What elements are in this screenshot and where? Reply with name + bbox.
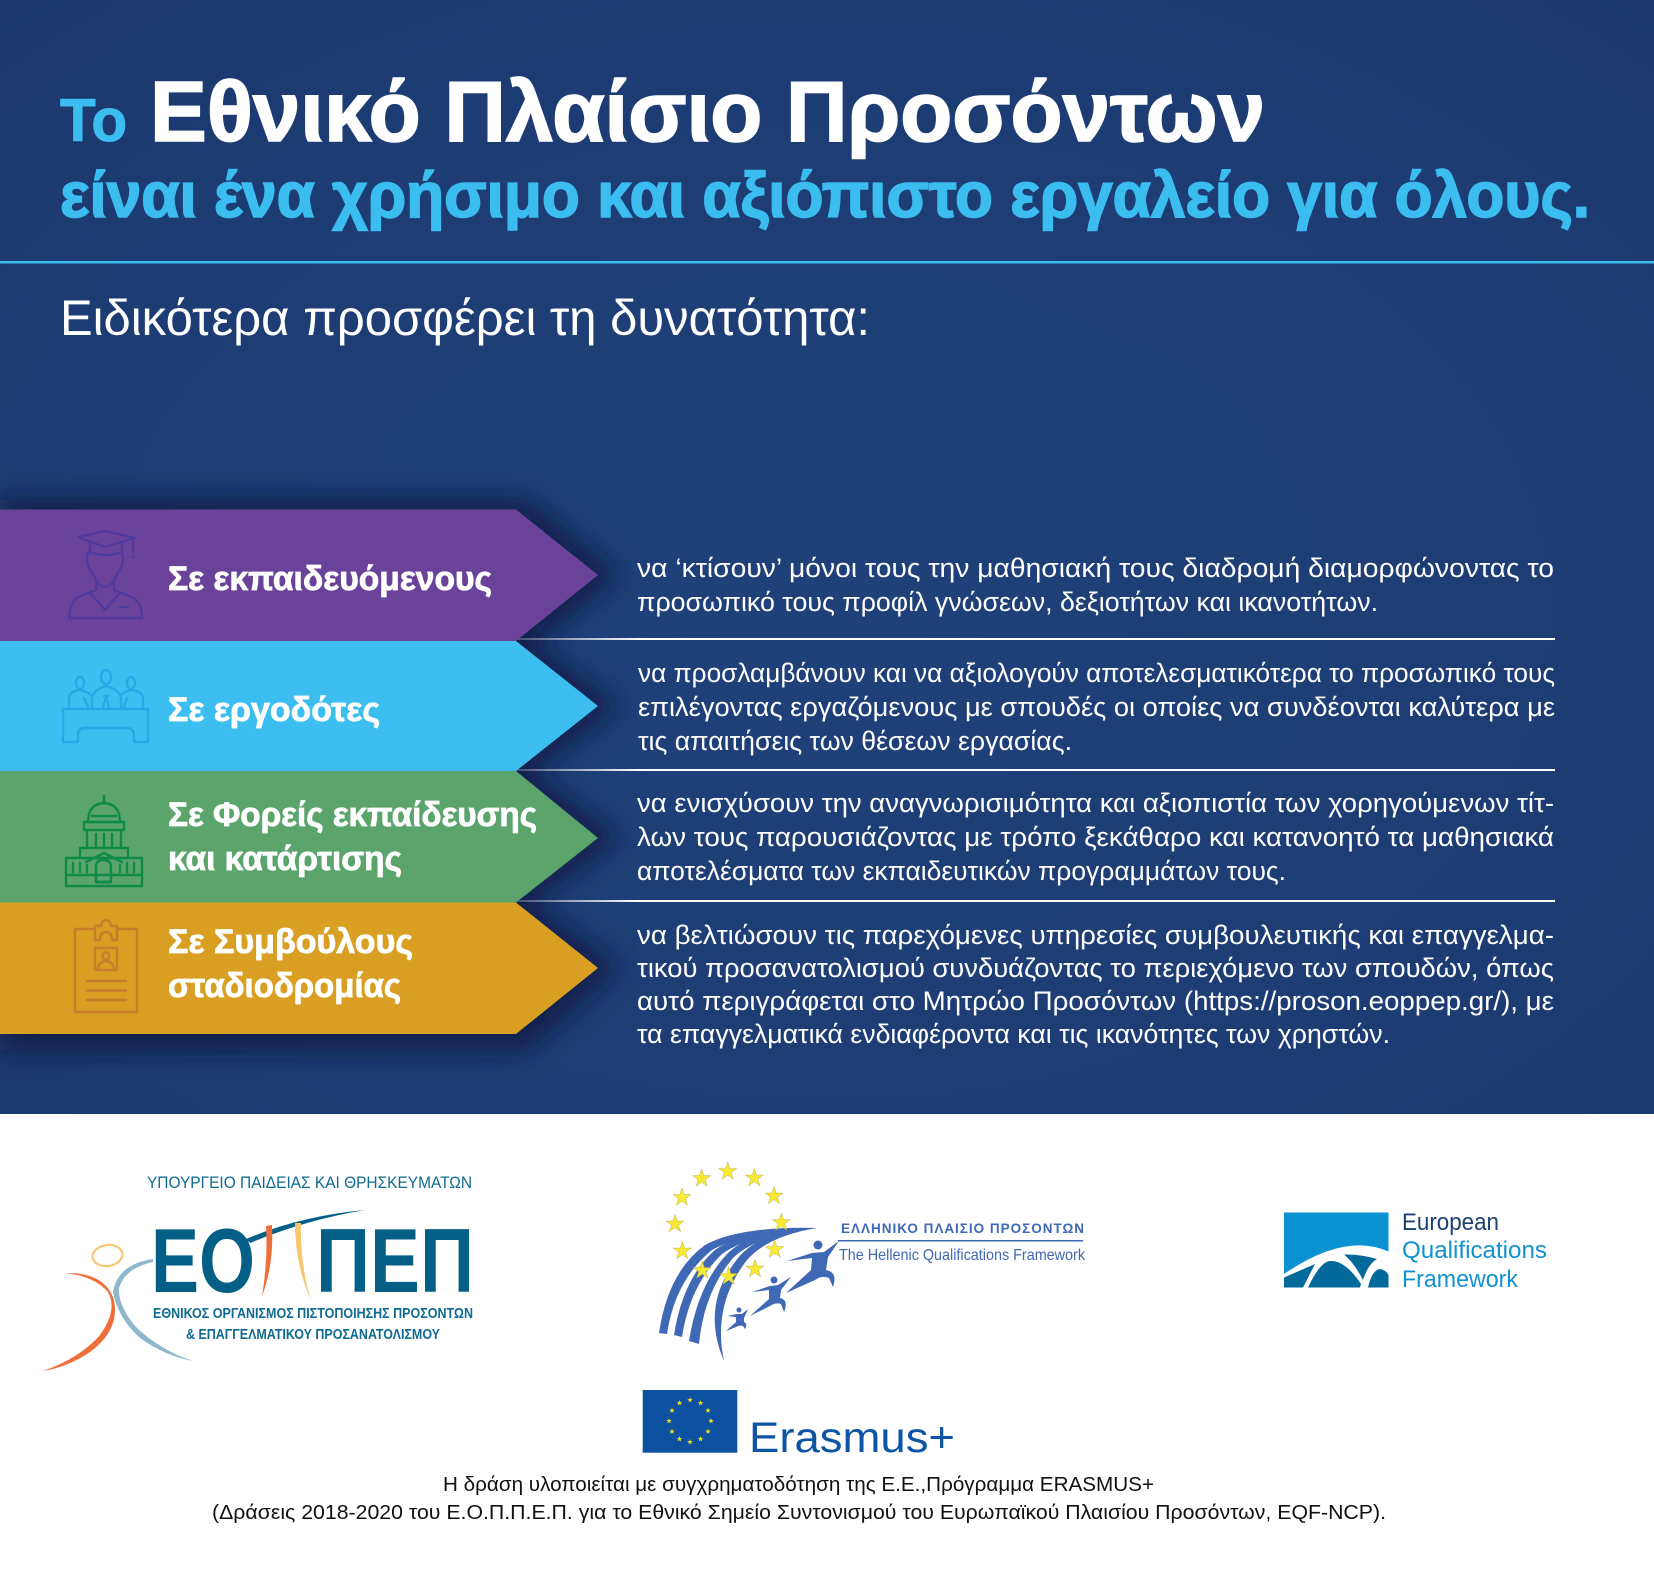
logo: EOPPEP: ΕΟ [151, 1211, 255, 1312]
banner: learners [0, 510, 598, 641]
subtitle: είναι ένα χρήσιμο και αξιόπιστο εργαλείο για όλους. [60, 159, 1590, 231]
label: education and training providers: και κατάρτισης [168, 840, 402, 878]
figures [726, 1240, 839, 1331]
text block: career counsellors: να βελτιώσουν τις παρεχόμενες υπηρεσίες συμβουλευτικής και επαγγελμα- [637, 920, 1554, 950]
text block: employers: τις απαιτήσεις των θέσεων εργασίας. [638, 726, 1072, 756]
label: career counsellors: σταδιοδρομίας [168, 967, 401, 1005]
logo: EOPPEP: ΠΕΠ [316, 1211, 474, 1312]
label: career counsellors [168, 923, 413, 1005]
logo: Erasmus+: Erasmus+ [749, 1414, 955, 1462]
text block: employers: επιλέγοντας εργαζόμενους με σπουδές οι οποίες να συνδέονται καλύτερα με [638, 692, 1555, 722]
logo: European Qualifications Framework: Qualifications [1402, 1237, 1547, 1264]
logo: European Qualifications Framework: Framework [1402, 1266, 1519, 1293]
text block: education providers: να ενισχύσουν την αναγνωρισιμότητα και αξιοπιστία των χορηγούμενων τίτ- [637, 788, 1554, 818]
logo: European Qualifications Framework: European [1402, 1209, 1499, 1236]
text block: learners: προσωπικό τους προφίλ γνώσεων, δεξιοτήτων και ικανοτήτων. [637, 587, 1378, 617]
title: Εθνικό Πλαίσιο Προσόντων [150, 65, 1265, 160]
text block: employers [638, 658, 1555, 756]
icon: clipboard with profile [75, 920, 137, 1012]
text block: education providers: λων τους παρουσιάζοντας με τρόπο ξεκάθαρο και κατανοητό τα μαθησιακά [637, 822, 1554, 852]
logo: EOPPEP [43, 1173, 474, 1371]
banner: education providers [0, 771, 598, 902]
text block: career counsellors [637, 920, 1554, 1049]
label: career counsellors: Σε Συμβούλους [168, 923, 413, 961]
text block: education providers: αποτελέσματα των εκπαιδευτικών προγραμμάτων τους. [637, 856, 1286, 886]
header divider [0, 261, 1654, 264]
logo: EOPPEP: ΕΘΝΙΚΟΣ ΟΡΓΑΝΙΣΜΟΣ ΠΙΣΤΟΠΟΙΗΣΗΣ ΠΡΟΣΟΝΤΩΝ [153, 1306, 473, 1322]
footer credit text: Η δράση υλοποιείται με συγχρηματοδότηση της Ε.Ε.,Πρόγραμμα ERASMUS+ [443, 1474, 1154, 1496]
logo: European Qualifications Framework [1284, 1209, 1547, 1293]
text block: career counsellors: τα επαγγελματικά ενδιαφέροντα και τις ικανότητες των χρηστών. [637, 1019, 1390, 1049]
icon: employers at table [63, 670, 148, 742]
logo: Erasmus+ [643, 1390, 955, 1462]
section heading: Ειδικότερα προσφέρει τη δυνατότητα: [60, 290, 870, 346]
footer credit text [212, 1474, 1386, 1524]
banner: employers [0, 641, 598, 771]
row separators [516, 638, 1555, 902]
text block: education providers [637, 788, 1554, 886]
stars [666, 1162, 790, 1284]
label: education and training providers: Σε Φορείς εκπαίδευσης [168, 796, 537, 834]
logo: EOPPEP: & ΕΠΑΓΓΕΛΜΑΤΙΚΟΥ ΠΡΟΣΑΝΑΤΟΛΙΣΜΟΥ [186, 1327, 440, 1343]
text block: learners: να ‘κτίσουν’ μόνοι τους την μαθησιακή τους διαδρομή διαμορφώνοντας το [637, 553, 1554, 583]
footer credit text: (Δράσεις 2018-2020 του Ε.Ο.Π.Π.Ε.Π. για το Εθνικό Σημείο Συντονισμού του Ευρωπαϊκού Πλαισίου Προσόντων, EQF-NCP). [212, 1502, 1386, 1524]
logo: Hellenic Qualifications Framework [659, 1162, 1086, 1361]
text block: learners [637, 553, 1554, 617]
EU flag stars [666, 1397, 714, 1444]
logo: Hellenic Qualifications Framework: ΕΛΛΗΝΙΚΟ ΠΛΑΙΣΙΟ ΠΡΟΣΟΝΤΩΝ [841, 1221, 1084, 1236]
arrow shadows [0, 500, 618, 1050]
panel: white footer [0, 1114, 1654, 1575]
label: employers: Σε εργοδότες [168, 691, 380, 729]
banner: career counsellors [0, 902, 598, 1034]
label: learners: Σε εκπαιδευόμενους [168, 560, 492, 598]
icon: institution building [66, 796, 142, 886]
icon: graduate [69, 531, 142, 618]
swoosh arcs [659, 1228, 817, 1361]
label: education and training providers [168, 796, 537, 878]
title: Το [60, 87, 127, 154]
logo: Hellenic Qualifications Framework: The Hellenic Qualifications Framework [839, 1247, 1086, 1264]
panel: dark blue header and content background [0, 0, 1654, 1114]
text block: career counsellors: τικού προσανατολισμού συνδυάζοντας το περιεχόμενο των σπουδών, όπως [637, 953, 1554, 983]
text block: employers: να προσλαμβάνουν και να αξιολογούν αποτελεσματικότερα το προσωπικό τους [638, 658, 1555, 688]
text block: career counsellors: αυτό περιγράφεται στο Μητρώο Προσόντων (https://proson.eoppep.gr/), με [637, 986, 1554, 1016]
logo: EOPPEP: ΥΠΟΥΡΓΕΙΟ ΠΑΙΔΕΙΑΣ ΚΑΙ ΘΡΗΣΚΕΥΜΑΤΩΝ [147, 1173, 472, 1192]
